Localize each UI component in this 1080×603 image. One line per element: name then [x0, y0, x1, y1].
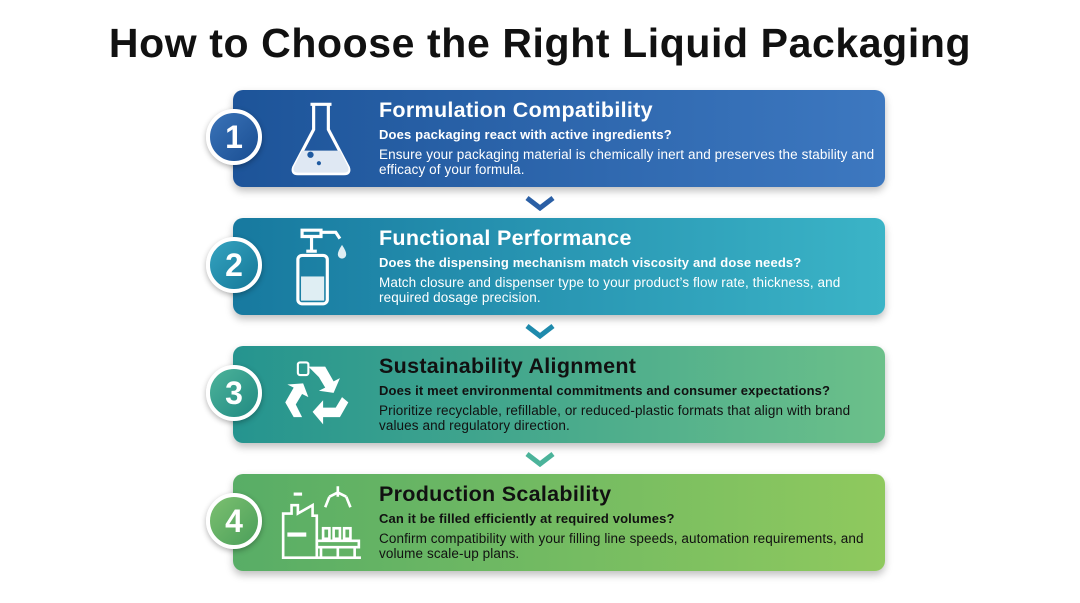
number badge 1: 1 [225, 119, 243, 155]
panel: formulation compatibility [233, 90, 885, 187]
text [379, 354, 850, 433]
panel: functional performance [233, 218, 885, 315]
arrow 1 [526, 196, 554, 211]
number badge 1 [206, 109, 262, 165]
text: Formulation Compatibility [379, 98, 653, 122]
text: Does the dispensing mechanism match viscosity and dose needs? [379, 255, 801, 270]
text: Does it meet environmental commitments and consumer expectations? [379, 383, 830, 398]
text [379, 226, 840, 305]
icon: flask [292, 102, 350, 176]
number badge 3 [206, 365, 262, 421]
panel: production scalability [233, 474, 885, 571]
icon: pump bottle [296, 228, 346, 306]
number badge 4 [206, 493, 262, 549]
text: Production Scalability [379, 482, 611, 506]
number badge 3: 3 [225, 375, 243, 411]
text: Confirm compatibility with your filling line speeds, automation requirements, and volume scale-up plans. [379, 531, 864, 561]
arrow 3 [526, 452, 554, 467]
text: Does packaging react with active ingredients? [379, 127, 672, 142]
text: Ensure your packaging material is chemically inert and preserves the stability and efficacy of your formula. [379, 147, 874, 177]
text [379, 482, 864, 561]
panel: sustainability alignment [233, 346, 885, 443]
number badge 2 [206, 237, 262, 293]
arrow 2 [526, 324, 554, 339]
text: Can it be filled efficiently at required volumes? [379, 511, 675, 526]
text: Prioritize recyclable, refillable, or reduced-plastic formats that align with brand values and regulatory direction. [379, 403, 850, 433]
title: How to Choose the Right Liquid Packaging [109, 20, 971, 66]
text: Sustainability Alignment [379, 354, 636, 378]
number badge 2: 2 [225, 247, 243, 283]
icon: recycle [285, 361, 348, 424]
number badge 4: 4 [225, 503, 243, 539]
text: Functional Performance [379, 226, 632, 250]
text [379, 98, 874, 177]
icon: factory line [282, 486, 361, 559]
text: Match closure and dispenser type to your product’s flow rate, thickness, and required dosage precision. [379, 275, 840, 305]
